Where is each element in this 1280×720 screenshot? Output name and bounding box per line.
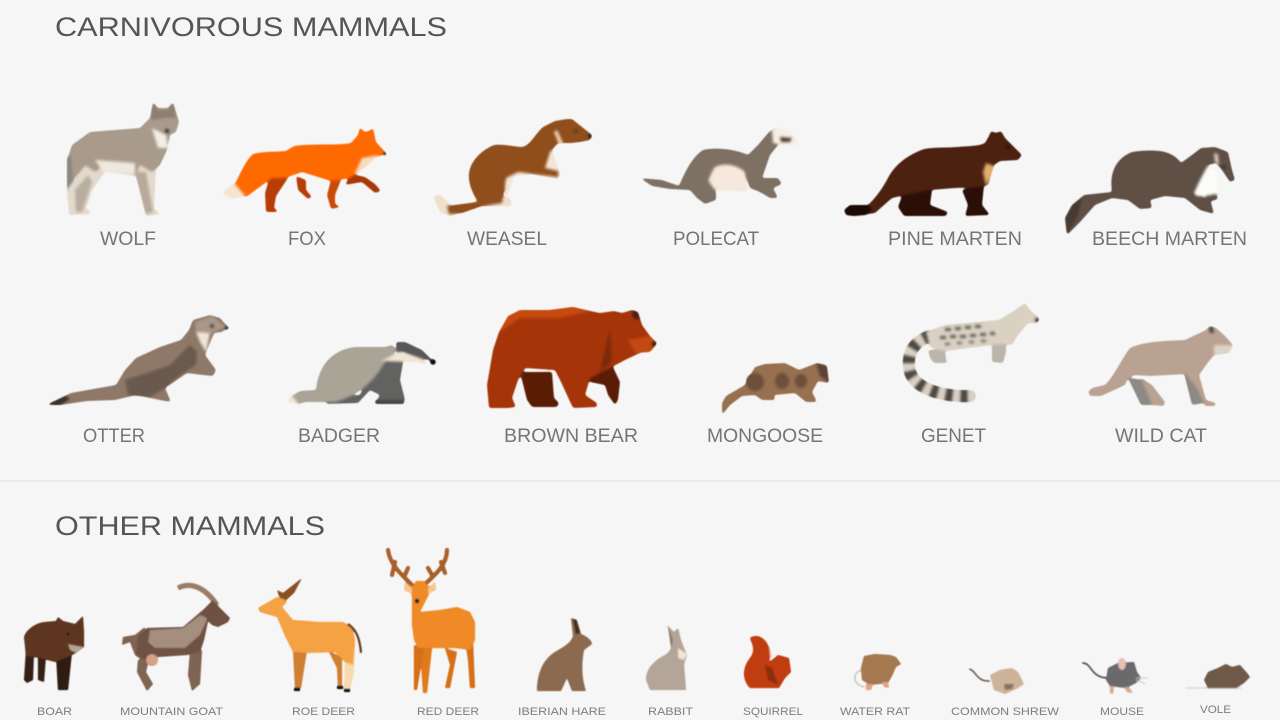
icon: red deer	[388, 550, 475, 693]
label: mountain goat: MOUNTAIN GOAT	[120, 706, 223, 718]
label: weasel: WEASEL	[467, 229, 547, 250]
icon: water rat	[855, 654, 901, 690]
label: boar: BOAR	[37, 706, 72, 718]
icon: common shrew	[969, 668, 1024, 694]
label: iberian hare: IBERIAN HARE	[518, 706, 606, 718]
label: beech marten: BEECH MARTEN	[1092, 229, 1247, 250]
icon: beech marten	[1065, 147, 1235, 235]
icon: polecat	[640, 127, 799, 204]
icon: pine marten	[844, 131, 1022, 216]
label: water rat: WATER RAT	[840, 706, 910, 718]
label: fox: FOX	[288, 229, 326, 250]
icon: brown bear	[487, 307, 657, 408]
label: roe deer: ROE DEER	[292, 706, 355, 718]
label: squirrel: SQUIRREL	[743, 706, 803, 718]
icon: fox	[222, 127, 387, 212]
icon: genet	[909, 303, 1039, 396]
heading: carnivorous mammals: CARNIVOROUS MAMMALS	[55, 12, 447, 42]
heading: other mammals: OTHER MAMMALS	[55, 511, 325, 541]
icon: badger	[287, 342, 436, 404]
label: wolf: WOLF	[100, 229, 156, 250]
label: vole: VOLE	[1200, 704, 1231, 716]
icon: mongoose	[722, 363, 829, 415]
label: brown bear: BROWN BEAR	[504, 426, 638, 447]
label: mouse: MOUSE	[1100, 706, 1144, 718]
icon: roe deer	[258, 578, 361, 692]
label: wild cat: WILD CAT	[1115, 426, 1207, 447]
label: red deer: RED DEER	[417, 706, 479, 718]
icon: weasel	[433, 119, 592, 216]
label: mongoose: MONGOOSE	[707, 426, 823, 447]
icon: mountain goat	[122, 585, 230, 691]
label: genet: GENET	[921, 426, 986, 447]
icon: boar	[24, 616, 84, 690]
icon: wolf	[67, 102, 179, 216]
label: otter: OTTER	[83, 426, 145, 447]
icon: iberian hare	[537, 618, 592, 691]
label: rabbit: RABBIT	[648, 706, 693, 718]
label: polecat: POLECAT	[673, 229, 759, 250]
icon: vole	[1186, 664, 1250, 688]
label: common shrew: COMMON SHREW	[951, 706, 1060, 718]
label: badger: BADGER	[298, 426, 380, 447]
icon: rabbit	[646, 625, 687, 690]
label: pine marten: PINE MARTEN	[888, 229, 1022, 250]
icon: otter	[46, 315, 229, 405]
icon: squirrel	[744, 636, 791, 688]
icon: mouse	[1082, 658, 1148, 694]
icon: wild cat	[1088, 326, 1233, 406]
